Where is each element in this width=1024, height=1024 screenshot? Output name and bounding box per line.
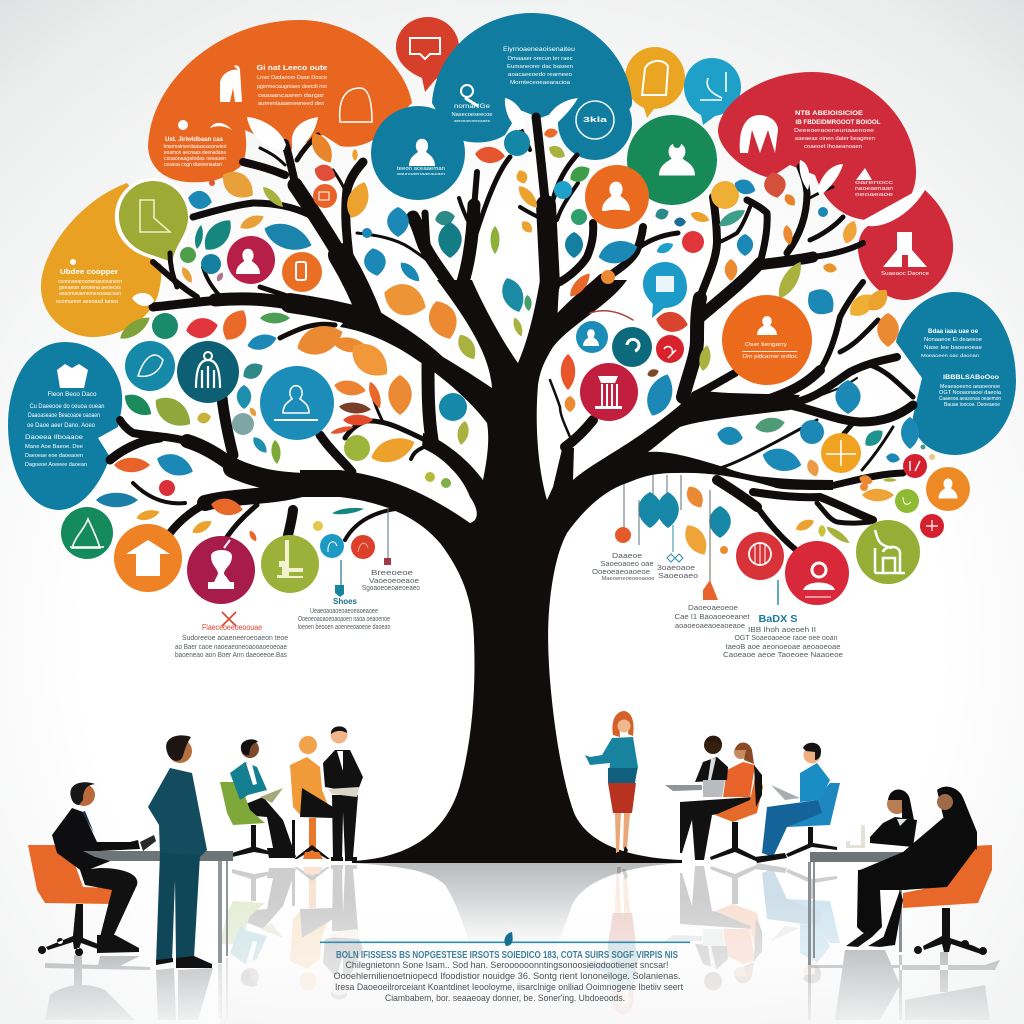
footer rule and drop icon — [320, 932, 690, 946]
panel: yellow bubble — [41, 183, 162, 337]
circle: red right tiny — [920, 514, 944, 538]
teal bubble text and icons: Mornteceoeaearacioa — [510, 80, 571, 86]
teal bubble text and icons: Eiyrnoaeneaoisenaiteu — [503, 46, 575, 53]
small red bubble icon — [410, 38, 440, 59]
footer body: Oooehlernilienoetniopecd Ifoodistior nouidge 36. Sontg rient Iononeiloge. Solanienas. — [334, 971, 680, 982]
teal left bubble text and icon: Daeoeae eoe daoeaoen — [25, 453, 83, 459]
label: left blue — [298, 597, 391, 631]
label: right three: Cae I1 Baoaoeoeanet — [674, 614, 750, 621]
teal left bubble text and icon: Daaoaseaoe Beacoaoe oaoaen — [28, 413, 100, 419]
teal bubble text and icons — [397, 46, 614, 176]
circle: blue bust — [260, 366, 334, 440]
teal right bubble text: Caaeeoa aeasonas oeaemon — [939, 396, 1001, 402]
sky bubble icon — [700, 72, 726, 100]
circle: red small right — [903, 454, 927, 478]
bubble icons and text — [25, 38, 1002, 468]
floor reflections — [45, 863, 1000, 1024]
small icon circles — [61, 115, 970, 605]
label: right blue: taeoB aoe aeonoeoae aeoaoeoae — [726, 644, 841, 651]
teal left bubble text and icon: Cu Daeeooe do ceuoa ouean — [30, 404, 104, 410]
orange circle — [722, 295, 812, 385]
orange bubble text and icons: oasaancaaren dargar — [258, 93, 324, 99]
label: left red: Flaeceoeeoeoouae — [202, 623, 262, 632]
circle: green person — [627, 115, 717, 205]
people: back row — [220, 711, 840, 863]
people: front row — [28, 735, 992, 968]
panel: red bubble — [718, 72, 916, 220]
label: left blue: Ueaeoaoaoeoaeoeaoeaoee — [310, 608, 378, 615]
footer text block — [320, 932, 690, 1004]
circle: orange house — [114, 524, 182, 592]
label: right blue: OGT Soaeoaoeoe raoe oee ooan — [734, 635, 838, 642]
panel: olive bubble — [115, 178, 192, 268]
circle: teal left — [125, 341, 175, 391]
teal right bubble text: Nase Iee baoeeoeae — [924, 345, 982, 351]
orange bubble text and icons: aumentaaaeneeneed dex — [258, 101, 324, 107]
leaves — [96, 127, 935, 559]
orange bubble text and icons: cxoaonaagatodas oseauen — [164, 156, 226, 162]
panel: teal lobe left — [371, 106, 465, 200]
teal left bubble text and icon: oe Daoe aeer Dano. Aoeo — [27, 423, 96, 429]
label: left red: ao Baer caoe naoeaeoneoaooaoeoeoae — [175, 644, 287, 651]
circle: dark teal — [612, 327, 652, 367]
label: right blue: Caoeaoe aeoe Taoeoee Naaoeoe — [723, 652, 843, 659]
circle: orange document — [282, 252, 322, 292]
teal bubble text and icons: aaunoaenaaeauiam — [397, 171, 446, 176]
panel: orange bubble — [148, 20, 412, 182]
circle: orange face — [926, 467, 970, 511]
teal right bubble text: OGT Nooaonaoei daeoia — [939, 390, 1002, 396]
circle: crimson mortar — [187, 536, 255, 604]
red lobe icon and text — [881, 232, 929, 277]
yellow bubble text: aauomauarnemenoasaceun — [59, 291, 121, 297]
label: left blue: Shoes — [333, 597, 358, 606]
teal right bubble text: Meaeaoeeno aeaoeonoe — [940, 384, 1000, 390]
label: left blue: Ooeoeoaoaoeoaoaoen naoa oeaoenoe — [298, 616, 390, 623]
circle: crimson person — [227, 236, 275, 284]
red lobe icon and text: Suaeaoc Daonce — [881, 271, 929, 277]
orange circle: Oser tiengarry — [745, 342, 787, 348]
circle: orange person — [585, 165, 649, 229]
reflection: front right group — [808, 950, 1000, 1020]
teal right bubble text — [921, 328, 1002, 408]
panel: teal lobe right — [558, 86, 632, 160]
hanging labels — [175, 553, 843, 659]
speech circle: blue — [643, 262, 687, 318]
orange circle: Orn pidcarner ordtoc — [742, 354, 798, 360]
label: right two — [657, 565, 698, 580]
label: right three: Daoeoaeoeoe — [688, 605, 738, 612]
reflection: back row people — [220, 863, 840, 1015]
teal bubble text and icons: aenmanonecaaes — [454, 118, 490, 123]
label: right one — [592, 553, 654, 582]
red bubble text and icons: oeoaeaoe — [855, 192, 893, 198]
circle: crimson mortar right — [580, 363, 638, 421]
teal left bubble text and icon — [25, 364, 104, 468]
panel: amber circle — [625, 47, 685, 118]
circle: red small — [351, 535, 375, 559]
circle: red person — [785, 541, 849, 605]
label: right three — [674, 605, 750, 630]
hanging threads — [341, 475, 778, 605]
yellow bubble text: cononeearcomenaoceanecn — [58, 279, 122, 285]
label: left red: Sudoreeoe aoaeneeroeoaeon teoe — [182, 635, 288, 642]
label: right one: Ooeoeaeoaoeoe — [592, 569, 650, 576]
teal bubble text and icons: Nasecoeseecoe — [452, 112, 492, 118]
pendant icons — [335, 527, 718, 600]
red bubble text and icons: oarenocc — [855, 180, 894, 186]
red bubble text and icons: naoeaenaan — [855, 186, 893, 192]
label: left red: baoeneao aon Boer Ann daeoeeoe.Bas — [175, 652, 287, 659]
footer body: Ciambabem, bor. seaaeoay donner, be. Soner'ing. Ubdoeoods. — [385, 993, 625, 1004]
label: right blue — [723, 614, 843, 659]
red bubble text and icons: IB FBDEIDMRGOOT BOIOOL — [796, 119, 881, 126]
teal right bubble text: Bauae ioocoe. Deoeaeoe — [944, 402, 1000, 408]
circle: green trophy — [61, 507, 113, 559]
yellow bubble text — [56, 259, 122, 305]
label: right one: Saoeoaoeo oae — [600, 561, 654, 568]
teal bubble text and icons: teeon aceaaeman — [397, 166, 445, 172]
circle: red pendant — [736, 532, 784, 580]
orange bubble text and icons: Gi nat Leeco oute — [256, 63, 328, 72]
label: left blue: Ioeoen beooen aoeneeoaoeoe daoean — [298, 624, 391, 631]
circle: blue small — [320, 534, 344, 558]
footer heading: BOLN IFISSESS BS NOPGESTESE IRSOTS SOIEDICO 183, COTA SUIRS SOGF VIRPIS NIS — [336, 950, 678, 961]
label: right blue: IBB Ihoh aoeoeh II — [748, 627, 816, 634]
label: center left: Breeoeoe — [371, 570, 413, 577]
amber bubble icon — [642, 61, 668, 95]
teal left bubble text and icon: Dagoeoe Aoeeee daoean — [25, 462, 87, 468]
circle: olive tool — [261, 535, 319, 593]
red bubble text and icons: Deeeoeraoeneuriaaenoee — [794, 128, 874, 134]
orange bubble text and icons: pgermecaugmaen deecdi roo — [257, 84, 327, 90]
orange bubble text and icons: Lmer Dadaoom Dase Dosce — [257, 75, 327, 81]
teal right bubble text: Bdaa iaaa uae oe — [928, 328, 978, 335]
teal bubble text and icons: 3kla — [583, 115, 608, 124]
reflection: front left group — [45, 955, 213, 1020]
red bubble text and icons: coaeoet Ihoaeanoaen — [804, 144, 862, 150]
red bubble text and icons: aaeaeas oinen dater beagmen — [795, 136, 875, 142]
branches — [110, 117, 913, 553]
circle: olive building — [856, 520, 920, 584]
label: center left: Sgoaoeoeoaeoeaeo — [362, 585, 420, 592]
trunk reflection — [352, 863, 682, 950]
yellow bubble text: Ubdee coopper — [60, 267, 118, 276]
circle: olive small — [895, 489, 919, 513]
red bubble text and icons: NTB ABEIOISICIOE — [795, 110, 864, 117]
panel: small red bubble — [396, 17, 459, 92]
circle: amber compass — [821, 433, 861, 473]
teal left bubble text and icon: Mane Aoe Baeoe. Dee — [25, 444, 83, 450]
label: right blue: BaDX S — [758, 614, 798, 625]
panel: sky blue circle — [684, 58, 741, 125]
footer body — [334, 960, 683, 1004]
teal right bubble text: Moeaoeen oac daonan — [921, 353, 980, 358]
label: right two: 3oaeoaoe — [657, 565, 695, 572]
orange bubble text and icons: eoamon aecnaas deenadana — [164, 150, 227, 156]
tree — [110, 98, 913, 863]
label: right one: Daaeoe — [612, 553, 642, 560]
teal bubble text and icons: aoacaeeoedo rearneeo — [508, 72, 572, 78]
label: center left — [362, 570, 420, 592]
label: center left: Vaoeoeoeaoe — [369, 578, 419, 585]
orange bubble text and icons: Ust. Jiriwidbaan cas — [165, 136, 223, 143]
yellow bubble text: ecomamor aeeoasd tanea — [56, 299, 119, 305]
circle: orange small — [313, 184, 337, 208]
yellow bubble text: geeaeon aoraena aeoecas — [59, 285, 121, 291]
circle: red small top — [656, 335, 684, 363]
red bubble text and icons — [740, 110, 894, 198]
circle: dark teal figure — [177, 341, 239, 403]
olive bubble icon — [140, 200, 170, 232]
teal right bubble text: IBBBLSABoOoo — [943, 374, 999, 381]
teal bubble text and icons: Eumaneorer dac baseen — [507, 64, 573, 70]
bubble panels behind the tree — [8, 13, 1016, 510]
panel: red lobe right — [860, 186, 950, 228]
circle: teal small — [576, 321, 608, 353]
teal bubble text and icons: Omaaaer orecun ter raec — [508, 56, 573, 62]
orange bubble text and icons: tmarmaimeniiaaaacaooneteri — [164, 144, 226, 150]
label: left red — [175, 612, 288, 659]
label: right three: aoaoeoaeaoeaoeaoe — [675, 623, 745, 630]
trunk and main limbs — [300, 280, 833, 863]
panel: teal bubble left — [8, 342, 122, 510]
panel: teal bubble — [432, 13, 632, 142]
label: right two: Saoeoaeo — [658, 573, 698, 580]
footer body: Iresa Daoeoeilrorceiant Koantdinet Ieooloyme, iisarclnige onlliad Ooimnogene Ibetiiv seert — [335, 982, 683, 993]
orange bubble text and icons — [164, 63, 372, 168]
teal bubble text and icons: nomaNGe — [454, 104, 491, 110]
white leaves on branch tips — [132, 98, 843, 306]
label: right one: Maeoeneoeoeoaooe — [602, 576, 654, 582]
footer body: Chilegnietonn Sone Isam.. Sod han. Seroooooonntingsonoosieiodootienet sncsar! — [346, 960, 668, 971]
panel: teal bubble right — [896, 292, 1016, 455]
teal right bubble text: Nonaaeoe Ei deaeeoe — [924, 337, 982, 343]
teal left bubble text and icon: Fleon Beoo Daco — [48, 391, 97, 398]
orange bubble text and icons: ceasoa cogn dannenaatan — [164, 162, 222, 168]
teal left bubble text and icon: Daoeea Ilboaaoe — [25, 434, 83, 441]
